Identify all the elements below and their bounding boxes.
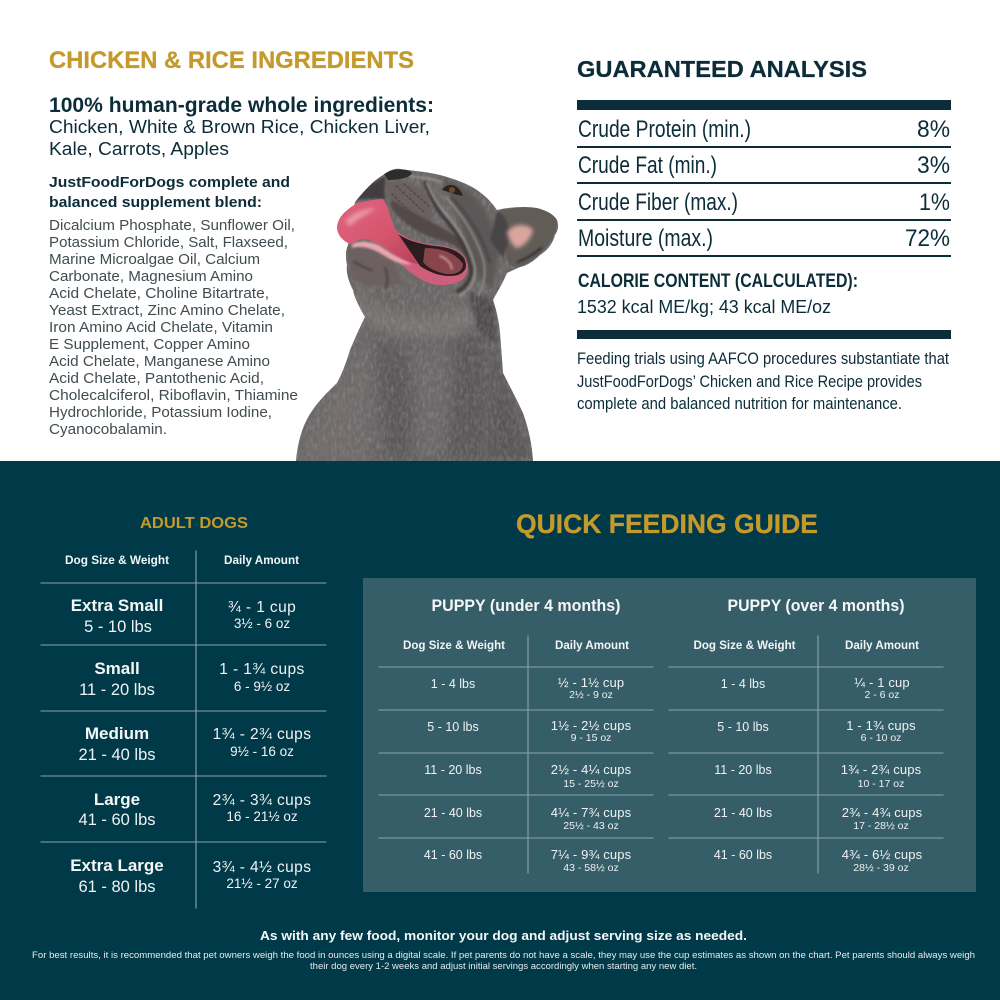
aafco statement [577,350,949,413]
supplement list: Iron Amino Acid Chelate, Vitamin [49,320,273,336]
nose [384,169,412,180]
analysis row: crude protein: 8% [917,116,950,143]
adult row: small: 1 - 1¾ cups [219,661,305,678]
adult row: medium: Medium [85,724,149,743]
adult table header: Dog Size & Weight [65,553,169,567]
puppy under 4 months table: 41 - 60 lbs [424,848,482,862]
analysis row: crude fat: 3% [917,152,950,179]
analysis row: crude protein: Crude Protein (min.) [578,116,751,143]
wrinkles [425,183,471,291]
puppy under 4 months table: 21 - 40 lbs [424,806,482,820]
mouth and lower lip [393,232,468,285]
adult table header: Daily Amount [224,553,299,567]
adult row: extra small: 3½ - 6 oz [234,616,290,631]
adult dogs heading: ADULT DOGS [140,515,248,532]
supplement list: E Supplement, Copper Amino [49,337,250,353]
guaranteed analysis panel [577,56,951,413]
puppy over 4 months table: Dog Size & Weight [694,638,796,652]
analysis row: moisture: Moisture (max.) [578,225,713,252]
puppy under 4 months table: 4¼ - 7¾ cups [551,805,632,820]
puppy under 4 months table: 43 - 58½ oz [563,862,619,874]
adult row: small: 6 - 9½ oz [234,679,290,694]
puppy under 4 months table: 2½ - 9 oz [569,689,613,701]
muzzle pad [386,181,432,220]
puppy over 4 months table: 1 - 4 lbs [721,677,765,691]
puppy over 4 months table: 17 - 28½ oz [853,820,909,832]
adult table header [65,553,299,567]
supplement list [49,218,298,438]
adult row: large [78,790,311,829]
adult row: large: 16 - 21½ oz [226,809,298,824]
supplement blend subheading [49,174,290,211]
footer note: their dog every 1-2 weeks and adjust initial servings accordingly when starting any new diet. [310,961,697,971]
adult row: small [79,659,305,699]
adult row: extra small: ¾ - 1 cup [228,599,296,616]
quick feeding guide heading: QUICK FEEDING GUIDE [516,509,818,539]
analysis row: crude fiber: Crude Fiber (max.) [578,189,738,216]
puppy over 4 months table: 1 - 1¾ cups [846,718,916,733]
puppy over 4 months table: 41 - 60 lbs [714,848,772,862]
puppy under 4 months table: 1½ - 2½ cups [551,718,632,733]
white top section [0,0,1000,461]
dark teal bottom section [0,461,1000,1000]
puppy over 4 months table: 28½ - 39 oz [853,862,909,874]
calorie content: 1532 kcal ME/kg; 43 kcal ME/oz [577,296,831,317]
adult row: extra large [70,856,311,896]
supplement list: Yeast Extract, Zinc Amino Chelate, [49,303,285,319]
head side [440,178,500,290]
puppy over 4 months table [668,597,944,874]
whole ingredients text block: Kale, Carrots, Apples [49,138,229,159]
ingredients heading: CHICKEN & RICE INGREDIENTS [49,47,414,74]
puppy under 4 months table: 15 - 25½ oz [563,778,619,790]
puppy over 4 months table: ¼ - 1 cup [854,675,910,690]
puppy under 4 months table: Dog Size & Weight [403,638,505,652]
calorie content: CALORIE CONTENT (CALCULATED): [578,270,858,292]
chin [347,243,402,286]
adult row: extra large: 61 - 80 lbs [78,878,156,896]
puppy over 4 months table: 4¾ - 6½ cups [842,847,923,862]
whole ingredients text block: Chicken, White & Brown Rice, Chicken Liver, [49,116,430,137]
aafco statement: JustFoodForDogs’ Chicken and Rice Recipe provides [577,373,922,391]
puppy over 4 months table: 1¾ - 2¾ cups [841,762,922,777]
puppy over 4 months table: Daily Amount [845,638,919,652]
analysis row: crude fat [578,152,950,179]
adult row: medium: 1¾ - 2¾ cups [213,726,311,743]
dark upper lip [355,176,386,200]
analysis row: crude fat: Crude Fat (min.) [578,152,717,179]
whole ingredients text block: 100% human-grade whole ingredients: [49,94,434,117]
puppy under 4 months title: PUPPY (under 4 months) [432,597,620,615]
puppy under 4 months table: 9 - 15 oz [571,732,611,744]
puppy over 4 months table: 21 - 40 lbs [714,806,772,820]
adult row: small: 11 - 20 lbs [79,681,155,699]
adult row: extra large: 3¾ - 4½ cups [213,859,311,876]
eye [442,185,463,196]
adult row: medium: 9½ - 16 oz [230,744,294,759]
supplement list: Acid Chelate, Choline Bitartrate, [49,286,269,302]
puppy under 4 months table: Daily Amount [555,638,629,652]
analysis row: crude fiber: 1% [919,189,950,216]
supplement blend subheading: balanced supplement blend: [49,194,262,211]
analysis row: crude protein [578,116,950,143]
supplement list: Hydrochloride, Potassium Iodine, [49,405,272,421]
puppy under 4 months table: 11 - 20 lbs [424,763,482,777]
supplement list: Cholecalciferol, Riboflavin, Thiamine [49,388,298,404]
puppy under 4 months table: 7¼ - 9¾ cups [551,847,632,862]
calorie content [577,270,858,317]
adult row: large: Large [94,790,140,809]
aafco statement: complete and balanced nutrition for maintenance. [577,395,902,413]
adult dogs table [40,515,326,908]
ear [497,207,557,267]
adult row: extra small: 5 - 10 lbs [84,618,152,636]
adult row: extra small [71,596,296,636]
supplement list: Dicalcium Phosphate, Sunflower Oil, [49,218,295,234]
adult row: small: Small [94,659,140,678]
footer note: As with any few food, monitor your dog and adjust serving size as needed. [260,928,747,943]
footer note [32,928,975,971]
adult row: extra small: Extra Small [71,596,163,615]
ingredients panel [49,47,434,438]
puppy over 4 months table: 6 - 10 oz [861,732,901,744]
supplement list: Acid Chelate, Pantothenic Acid, [49,371,264,387]
supplement list: Carbonate, Magnesium Amino [49,269,253,285]
analysis heading: GUARANTEED ANALYSIS [577,56,867,82]
adult row: large: 41 - 60 lbs [78,811,156,829]
analysis row: moisture [578,225,950,252]
puppy over 4 months title: PUPPY (over 4 months) [728,597,904,615]
puppy under 4 months table: ½ - 1½ cup [558,675,624,690]
puppy over 4 months table: 2 - 6 oz [864,689,900,701]
puppy under 4 months table: 25½ - 43 oz [563,820,619,832]
puppy under 4 months table: 2½ - 4¼ cups [551,762,632,777]
whole ingredients text block [49,94,434,159]
puppy under 4 months table: 1 - 4 lbs [431,677,475,691]
supplement blend subheading: JustFoodForDogs complete and [49,174,290,191]
supplement list: Cyanocobalamin. [49,422,167,438]
icon: french bulldog looking up [290,165,565,461]
supplement list: Potassium Chloride, Salt, Flaxseed, [49,235,288,251]
puppy over 4 months table: 11 - 20 lbs [714,763,772,777]
analysis row: moisture: 72% [905,225,950,252]
supplement list: Marine Microalgae Oil, Calcium [49,252,260,268]
aafco statement: Feeding trials using AAFCO procedures substantiate that [577,350,949,368]
puppy over 4 months table: 10 - 17 oz [858,778,904,790]
puppy tables panel [363,578,976,892]
supplement list: Acid Chelate, Manganese Amino [49,354,270,370]
puppy under 4 months table [378,597,654,874]
tongue [337,199,418,264]
adult row: large: 2¾ - 3¾ cups [213,792,311,809]
adult row: medium: 21 - 40 lbs [78,746,156,764]
footer note: For best results, it is recommended that pet owners weigh the food in ounces using a digital scale. If pet parents do not have a scale, they may use the cup estimates as shown on the chart. Pet parents should always weigh [32,950,975,960]
puppy under 4 months table: 5 - 10 lbs [427,720,479,734]
adult row: extra large: 21½ - 27 oz [226,876,298,891]
puppy over 4 months table: 5 - 10 lbs [717,720,769,734]
adult row: extra large: Extra Large [70,856,164,875]
adult row: medium [78,724,311,764]
analysis row: crude fiber [578,189,950,216]
puppy over 4 months table: 2¾ - 4¾ cups [842,805,923,820]
